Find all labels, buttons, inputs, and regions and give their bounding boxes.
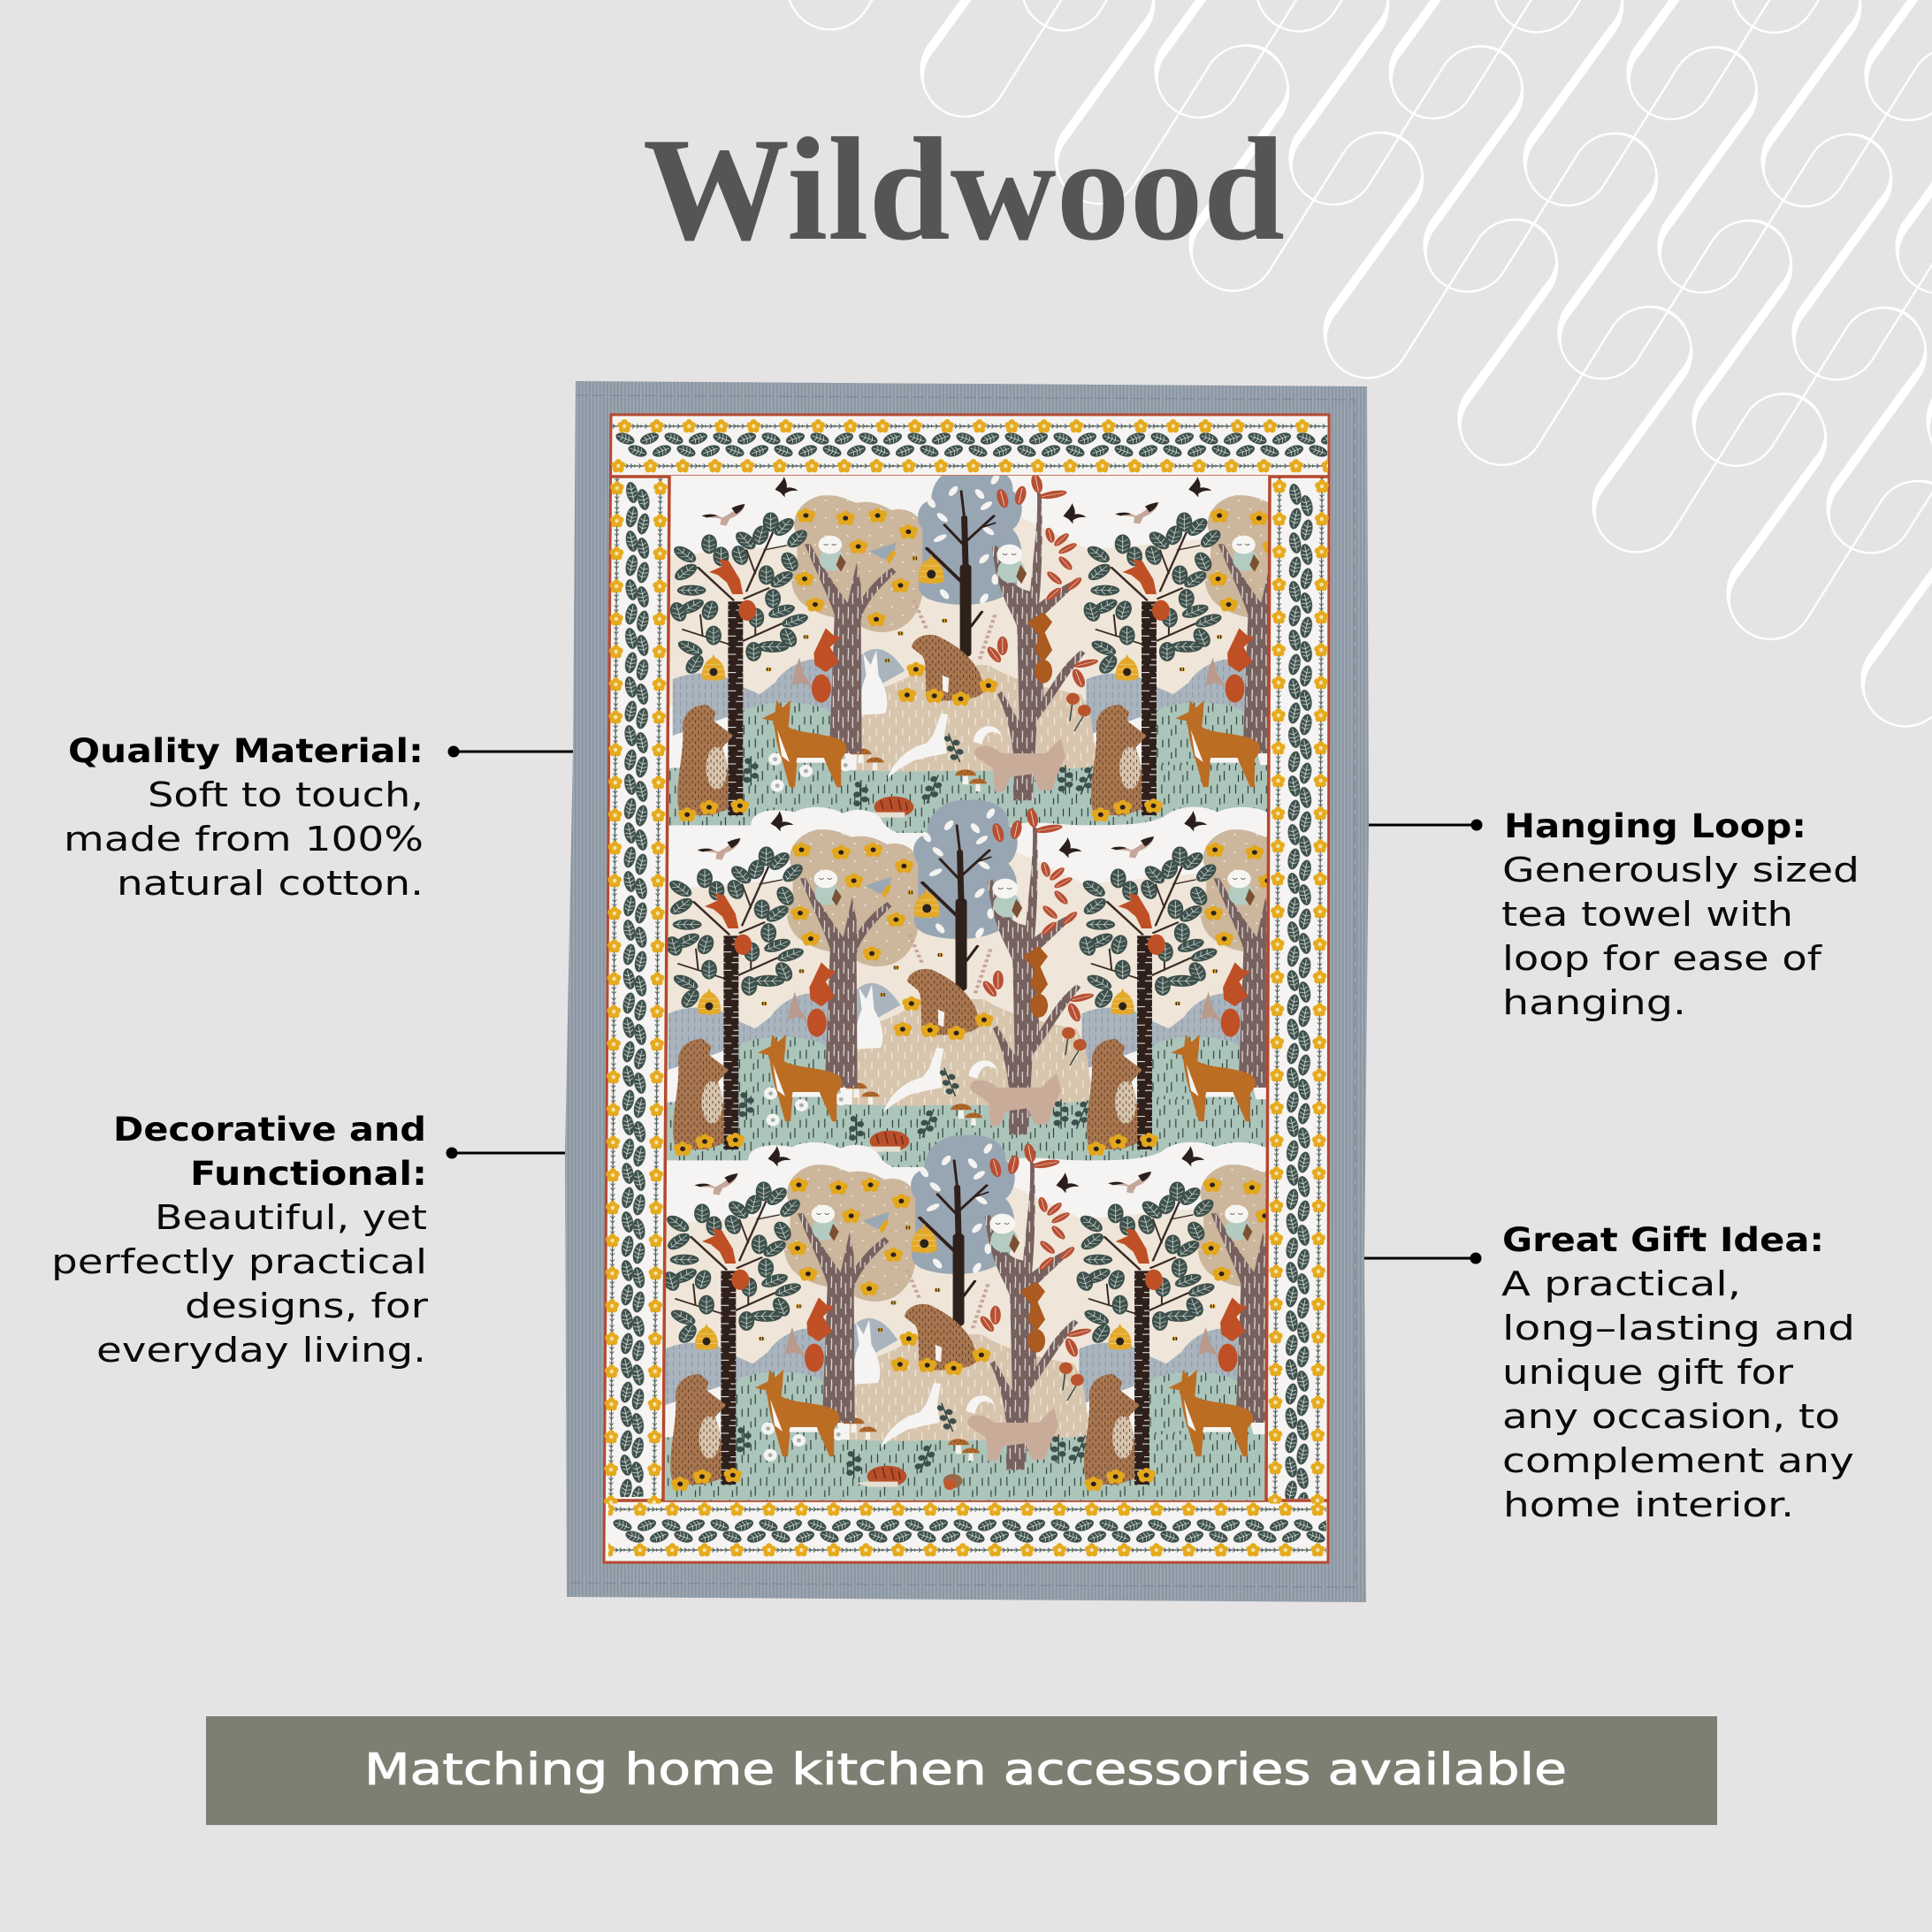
- banner text: Matching home kitchen accessories available: [364, 1745, 1567, 1795]
- callout text: everyday living.: [96, 1331, 426, 1370]
- callout text: A practical,: [1501, 1264, 1741, 1303]
- tan meadow: [857, 665, 1098, 786]
- red squirrel on mauve tree: [812, 628, 841, 703]
- pink sprigs: [913, 600, 995, 659]
- title: Wildwood: [643, 108, 1285, 271]
- blossom flowers: [796, 508, 918, 626]
- centre bee hive: [919, 554, 944, 584]
- decorative white chain-link pattern: [598, 0, 1932, 813]
- top border band: [610, 416, 1329, 477]
- mint grass band: [668, 765, 1283, 833]
- callout text: designs, for: [185, 1287, 428, 1325]
- callout text: Quality Material:: [68, 732, 424, 770]
- bees: [766, 556, 1223, 671]
- illustration repeat 1: [668, 476, 1268, 833]
- callout text: Decorative and: [113, 1111, 426, 1149]
- illustration repeat 3: [594, 1134, 1334, 1520]
- callout text: Generously sized: [1502, 851, 1859, 890]
- bee hive on the branch: [702, 654, 725, 681]
- right border column: [1264, 477, 1333, 1503]
- sprigs in the grass: [744, 732, 1099, 809]
- callout text: [51, 1111, 428, 1370]
- illustration repeat 2: [597, 799, 1337, 1185]
- towel printed border area: [600, 415, 1333, 1562]
- callout text: complement any: [1502, 1441, 1854, 1480]
- woodland illustration: [665, 476, 1268, 1501]
- callout text: [1501, 807, 1859, 1022]
- callout text: long–lasting and: [1502, 1309, 1855, 1348]
- panel: tea towel: [565, 381, 1369, 1602]
- blue-grey tree canopy: [918, 465, 1022, 605]
- centre yellow flowers: [897, 662, 997, 706]
- callout text: Functional:: [190, 1155, 427, 1193]
- callout: hanging loop: [1369, 807, 1859, 1022]
- centre mauve tree: [992, 491, 1085, 800]
- left border column: [600, 477, 671, 1503]
- white flowers: [768, 753, 852, 792]
- fox: [974, 726, 1065, 791]
- mauve tree: [805, 544, 896, 753]
- red squirrel on leafy tree: [709, 559, 756, 621]
- callout text: hanging.: [1502, 983, 1686, 1022]
- connector line: [447, 746, 573, 757]
- callout: great gift idea: [1364, 1221, 1855, 1524]
- centre squirrel: [1027, 612, 1052, 683]
- towel fabric: [565, 381, 1369, 1602]
- callout text: made from 100%: [64, 820, 424, 859]
- mint hill: [742, 702, 852, 786]
- dark centre tree: [927, 491, 995, 653]
- hedgehog: [863, 797, 913, 818]
- callout text: natural cotton.: [117, 864, 424, 903]
- callout: decorative and functional: [51, 1111, 565, 1370]
- blue bird: [870, 543, 896, 565]
- inner red frame: [663, 476, 1270, 1501]
- callout text: Soft to touch,: [148, 775, 424, 814]
- bottom border band: [607, 1499, 1329, 1561]
- grey peak behind rabbit: [852, 649, 905, 694]
- callout text: [1501, 1221, 1855, 1524]
- callout text: loop for ease of: [1502, 939, 1823, 978]
- repeating forest group: [668, 508, 918, 821]
- callout text: perfectly practical: [51, 1242, 427, 1281]
- small bird on mauve tree: [793, 658, 813, 687]
- standing rabbit: [860, 650, 887, 715]
- mushrooms: [851, 748, 987, 791]
- callout text: [64, 732, 424, 903]
- hem stitching: [570, 395, 1355, 1587]
- red leaves: [984, 474, 1100, 688]
- callout text: any occasion, to: [1502, 1397, 1840, 1436]
- callout text: tea towel with: [1501, 895, 1793, 934]
- callout text: home interior.: [1503, 1485, 1794, 1524]
- connector line: [1364, 1252, 1482, 1264]
- leafy tree: [668, 512, 812, 815]
- owl on centre tree: [997, 545, 1027, 584]
- callout text: unique gift for: [1502, 1353, 1793, 1392]
- brown bear: [677, 705, 733, 815]
- tan blossom tree canopy: [791, 495, 928, 632]
- connector line: [1369, 819, 1482, 831]
- deer: [762, 700, 847, 787]
- centre bear: [912, 635, 984, 701]
- birds: [702, 477, 1211, 526]
- grey hills: [673, 659, 835, 736]
- callout text: Beautiful, yet: [155, 1198, 427, 1237]
- robin: [951, 805, 970, 821]
- callout text: Great Gift Idea:: [1502, 1221, 1824, 1259]
- callout: quality material: [64, 732, 573, 903]
- banner: matching accessories: [206, 1716, 1717, 1825]
- white leaves on blue tree: [925, 473, 1001, 605]
- orange flowers: [1066, 693, 1091, 731]
- leaping rabbit: [888, 714, 948, 778]
- owl: [819, 536, 846, 572]
- callout text: Hanging Loop:: [1504, 807, 1806, 845]
- connector line: [446, 1148, 565, 1158]
- flowers at base: [678, 798, 749, 821]
